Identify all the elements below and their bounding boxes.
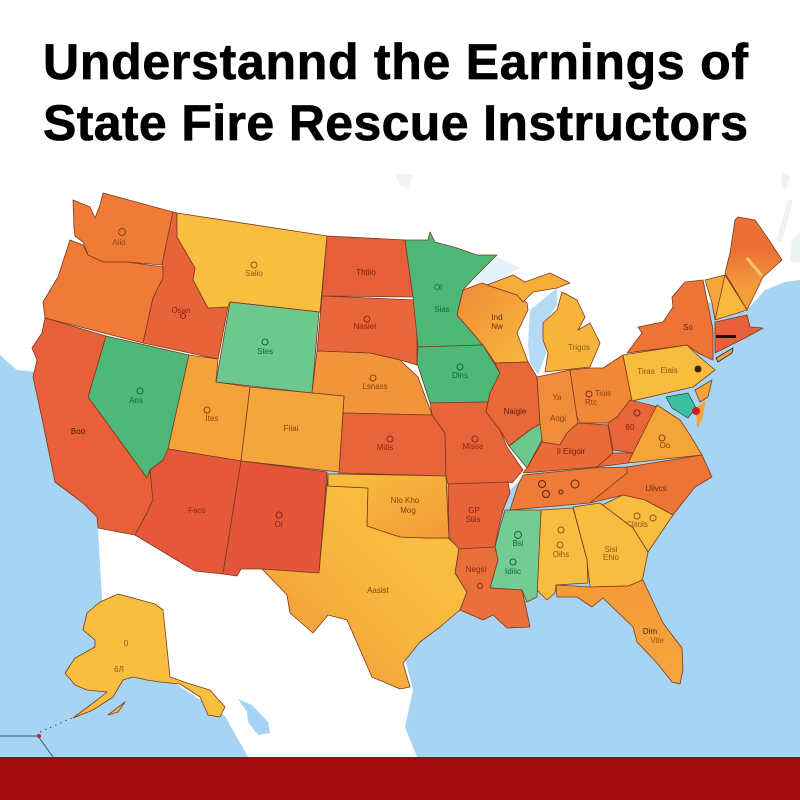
state: Oklahoma <box>328 474 449 538</box>
boundary line: bottom left <box>0 736 53 757</box>
state: New Mexico <box>223 461 327 576</box>
state: New Hampshire <box>715 275 747 320</box>
state: West Virginia: 80 <box>626 423 635 432</box>
state: South Carolina: Ctiiols <box>626 520 648 529</box>
state: Kentucky: Il Eiigoir <box>557 447 586 456</box>
map: United States <box>32 172 800 718</box>
state: New York <box>627 280 713 360</box>
state: Mississippi: Idiiic <box>505 567 521 576</box>
state: Alabama <box>537 508 588 600</box>
state: Indiana: Ya <box>552 393 562 402</box>
state: Montana <box>177 213 327 312</box>
state: Oklahoma: Nlo Kho <box>391 496 420 505</box>
state: Maine <box>725 217 782 310</box>
state: Idaho: Osan <box>171 306 191 315</box>
state: Ohio: Tiois <box>595 389 611 398</box>
state: Arkansas: Stiis <box>465 515 481 524</box>
islands: Alaska inset: 0 <box>124 639 129 648</box>
title: Understannd the Earnings of <box>43 34 748 90</box>
marker: Chesapeake red dot <box>692 400 706 428</box>
state: southern New England <box>715 315 763 353</box>
state: Ohio <box>570 355 632 423</box>
state: West Virginia <box>608 400 658 453</box>
state: Missouri: Misse <box>463 442 484 451</box>
state: North Carolina <box>590 455 712 515</box>
state: South Dakota: Nasiet <box>354 322 377 331</box>
speck: northern map edge <box>395 174 414 188</box>
lake: Lake Superior shading <box>472 257 520 285</box>
islands: Alaska inset <box>65 594 225 718</box>
state: Pennsylvania: Tiras <box>637 367 655 376</box>
footer bar <box>0 757 800 800</box>
lake: Lake Michigan <box>528 288 557 375</box>
state: Wyoming <box>216 302 319 393</box>
state: Nevada <box>88 336 189 478</box>
state: Washington: Aiio <box>112 238 126 247</box>
state: Nebraska <box>312 351 432 415</box>
state: Wisconsin: Ind <box>491 313 503 322</box>
state: Georgia <box>573 503 648 587</box>
state: Mississippi <box>490 510 541 602</box>
state: Georgia: Sisi <box>605 545 618 554</box>
lake: inland water near Alaska <box>238 699 270 735</box>
state: Alabama: Oihs <box>553 550 569 559</box>
state: Missouri <box>430 402 523 485</box>
state: South Carolina <box>602 495 673 552</box>
state: Arkansas: GP <box>468 506 480 515</box>
state: North Carolina: Uiivcs <box>645 484 667 493</box>
state: Nevada: Ans <box>129 396 143 405</box>
state: Louisiana: Negsi <box>466 565 486 574</box>
marker: red dot <box>37 734 41 738</box>
state: Long Island <box>716 348 733 362</box>
state: Delaware and Maryland coast <box>646 388 708 438</box>
state: Arizona: Faco <box>188 506 206 515</box>
state: California: Boo <box>71 427 86 436</box>
state: California <box>32 318 153 535</box>
state: Florida: Vite <box>650 636 664 645</box>
state: Montana: Salio <box>245 269 263 278</box>
state: Oregon <box>43 240 163 343</box>
state: Colorado: Fiiai <box>284 424 299 433</box>
state: Minnesota: Ol <box>434 283 442 292</box>
state: Wyoming: Stes <box>257 347 273 356</box>
state: New Jersey <box>695 380 712 402</box>
state: Texas: Aasist <box>367 586 390 595</box>
state: Colorado <box>241 387 344 472</box>
state: Florida: Dim <box>643 627 657 636</box>
title <box>43 34 748 151</box>
state: South Dakota <box>317 296 417 365</box>
state: Kansas: Mitis <box>377 443 393 452</box>
state: Minnesota <box>405 232 497 347</box>
state: Illinois <box>486 362 540 446</box>
title: State Fire Rescue Instructors <box>43 95 748 151</box>
state: Illinois south (green) <box>509 424 542 468</box>
state: Nebraska: Lsnass <box>362 382 388 391</box>
state: Texas <box>262 474 467 689</box>
state: Ohio: Rtc <box>585 398 597 407</box>
state: New York: So <box>683 323 693 332</box>
state: Maine boundary stripe <box>747 258 762 276</box>
state: Virginia <box>628 405 702 463</box>
state: Idaho <box>143 212 228 359</box>
state: Pennsylvania: Eiais <box>660 366 678 375</box>
state: Indiana <box>537 370 578 445</box>
state: Arizona <box>135 449 241 574</box>
state: Wisconsin: Nw <box>491 322 503 331</box>
state: Minnesota: Sias <box>434 305 450 314</box>
state: Illinois: Naigie <box>504 407 527 416</box>
state: Oklahoma: Mog <box>400 506 416 515</box>
state: Mississippi: Bsi <box>512 539 524 548</box>
state: Kentucky <box>523 423 613 473</box>
state: Michigan lower peninsula <box>543 292 600 372</box>
state: Tennessee <box>510 467 627 510</box>
state: Louisiana <box>455 547 530 628</box>
state: Michigan upper peninsula <box>487 273 570 302</box>
ice streaks: north Atlantic <box>776 172 800 262</box>
background: ocean <box>0 280 800 757</box>
state: Wisconsin <box>457 283 528 363</box>
state: Indiana: Aogi <box>550 414 566 423</box>
state: North Dakota <box>322 236 413 297</box>
state: Pennsylvania <box>623 345 715 401</box>
state: Iowa <box>417 345 500 403</box>
state: Florida <box>556 580 683 684</box>
state: Georgia: Ehio <box>603 553 620 562</box>
state: Iowa: Dins <box>452 371 468 380</box>
state: Washington <box>73 193 173 265</box>
state: Kansas <box>339 413 446 476</box>
state: North Dakota: Thtiio <box>356 268 376 277</box>
state: Utah: Ites <box>206 414 218 423</box>
state: Arkansas <box>448 482 510 549</box>
state: Vermont <box>705 275 725 320</box>
state: Virginia: Oo <box>660 441 671 450</box>
state: Michigan lower peninsula: Trigos <box>568 343 590 352</box>
state: Virginia southwest <box>597 453 633 467</box>
state: Utah <box>168 355 250 461</box>
state: New Mexico: Or <box>275 520 284 529</box>
islands: Alaska inset: 6Л <box>114 665 124 674</box>
dotted line: Aleutian chain <box>40 718 72 732</box>
